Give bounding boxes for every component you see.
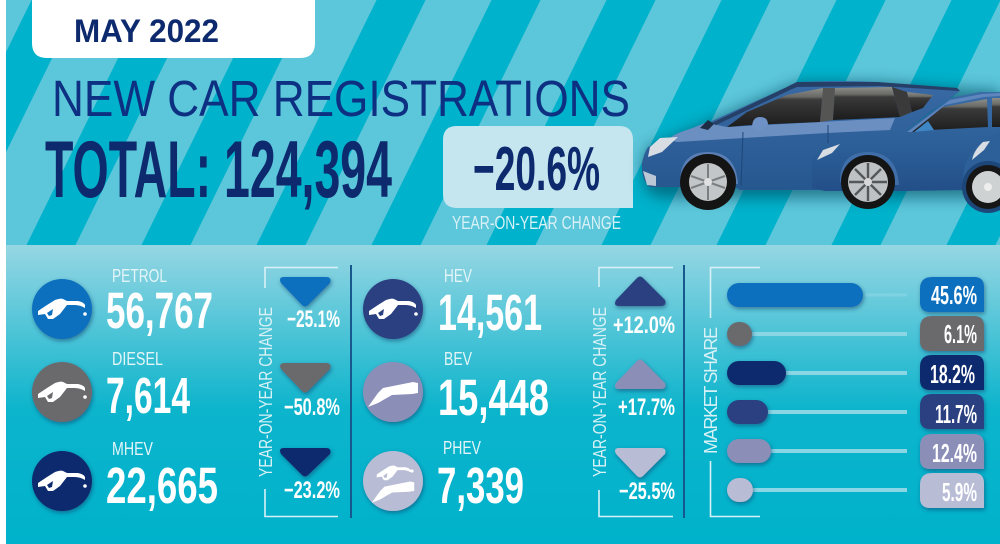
hev: [363, 266, 542, 341]
mhev change: [280, 448, 340, 504]
bev share: [727, 434, 984, 469]
phev change: −25.5%: [619, 478, 675, 505]
bev: BEV: [444, 349, 472, 369]
mhev change: −23.2%: [284, 477, 340, 504]
bev change: +17.7%: [618, 394, 675, 421]
car 2: [812, 92, 1000, 209]
car 3: [962, 132, 1000, 213]
year-on-year change column 2: YEAR-ON-YEAR CHANGE: [590, 307, 610, 477]
hev: 14,561: [438, 284, 542, 341]
petrol change: [280, 277, 340, 333]
bev: 15,448: [438, 369, 549, 426]
petrol: [32, 266, 213, 339]
hev change: [613, 276, 675, 339]
title: NEW CAR REGISTRATIONS: [52, 70, 630, 127]
petrol: PETROL: [112, 266, 167, 286]
year-on-year change column 1: YEAR-ON-YEAR CHANGE: [256, 307, 276, 477]
mhev share: [727, 355, 984, 390]
hev change: +12.0%: [613, 312, 675, 339]
bev change: [615, 360, 675, 421]
total year-on-year change callout: [443, 126, 633, 233]
divider: [683, 265, 685, 518]
petrol change: −25.1%: [287, 306, 340, 333]
hev share: [727, 394, 984, 429]
mhev: 22,665: [106, 457, 218, 514]
diesel share: [727, 316, 984, 351]
bev: [363, 349, 549, 426]
phev: PHEV: [443, 438, 481, 458]
phev: 7,339: [437, 457, 524, 514]
market share chart: MARKET SHARE: [701, 327, 721, 454]
lower panel background: [6, 245, 1000, 544]
petrol: 56,767: [106, 282, 213, 339]
diesel: 7,614: [106, 367, 190, 424]
hev: HEV: [444, 266, 472, 286]
total year-on-year change callout: YEAR-ON-YEAR CHANGE: [452, 213, 621, 233]
fuel column 1: [32, 266, 218, 514]
phev share: 5.9%: [942, 477, 977, 507]
year-on-year change column 2: [590, 268, 675, 516]
divider: [350, 265, 352, 518]
illustration: three blue cars: [642, 81, 1000, 213]
phev: [363, 438, 524, 514]
diesel: [32, 349, 190, 424]
date tab: MAY 2022: [74, 13, 219, 49]
date tab: [32, 0, 315, 58]
phev share: [727, 473, 984, 508]
total year-on-year change callout: −20.6%: [473, 135, 600, 204]
fuel column 2: [363, 266, 549, 514]
header panel with diagonal stripes: [6, 0, 1000, 245]
market share chart: [701, 268, 984, 516]
year-on-year change column 1: [256, 268, 340, 516]
diesel change: [280, 363, 340, 421]
petrol share: [727, 277, 984, 312]
car 1: [642, 81, 960, 210]
total registrations: TOTAL: 124,394: [45, 125, 392, 215]
phev change: [615, 448, 675, 505]
mhev: MHEV: [112, 439, 153, 459]
diesel change: −50.8%: [284, 394, 340, 421]
mhev: [32, 439, 218, 514]
diesel: DIESEL: [112, 349, 163, 369]
